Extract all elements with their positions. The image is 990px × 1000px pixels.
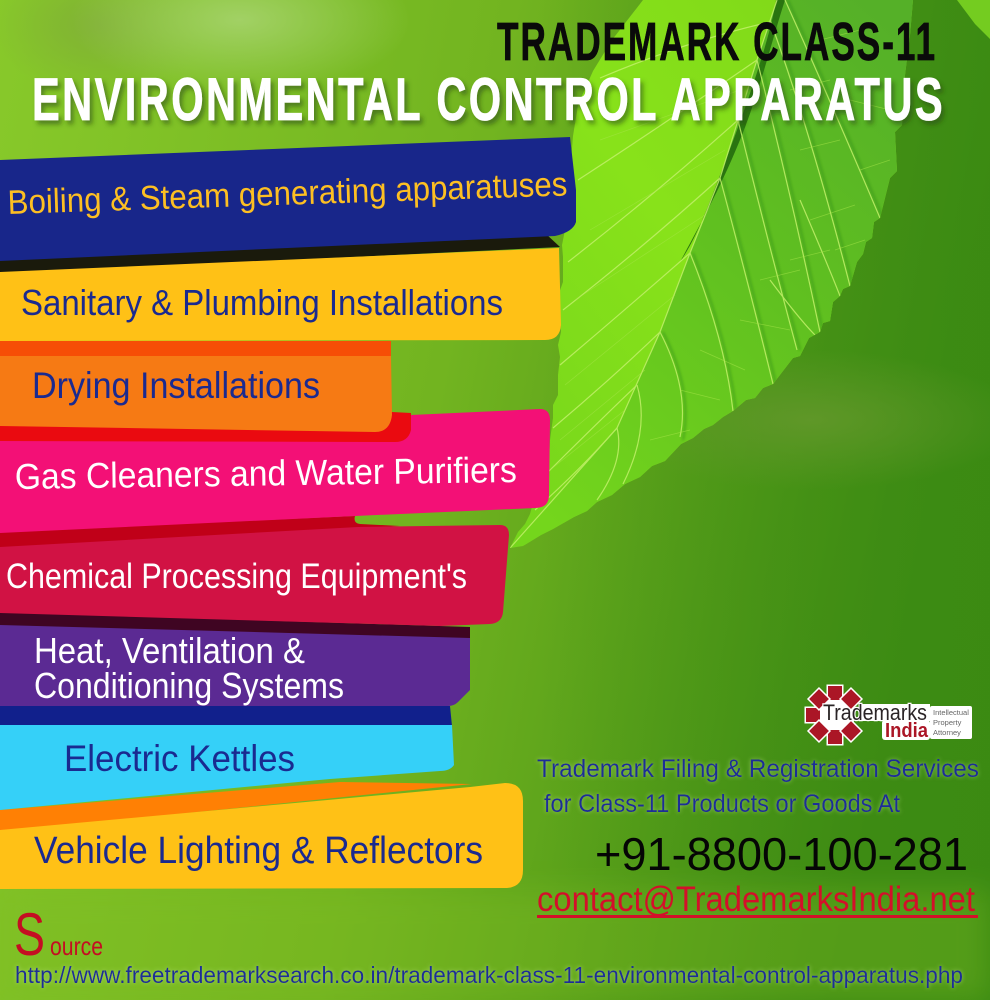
- band: Vehicle Lighting and Reflectors: [0, 782, 523, 889]
- leaf vein shadows: [663, 0, 883, 440]
- logo tagline: Attorney: [933, 728, 961, 737]
- logo white halo: [815, 695, 930, 740]
- band: Chemical Processing Equipment's: Chemical Processing Equipment's: [6, 557, 467, 596]
- band: Gas Cleaners and Water Purifiers: [0, 409, 550, 533]
- band: Sanitary and Plumbing Installations: Sanitary & Plumbing Installations: [21, 282, 503, 323]
- logo tagline: [930, 706, 972, 739]
- band: Boiling and Steam generating apparatuses: Boiling & Steam generating apparatuses: [7, 165, 568, 222]
- leaf right half: [510, 0, 930, 548]
- logo tagline: Intellectual: [933, 708, 969, 717]
- text: phone number: +91-8800-100-281: [595, 828, 968, 880]
- band: Heat, Ventilation and Conditioning Systems: Conditioning Systems: [34, 665, 344, 706]
- band: Sanitary and Plumbing Installations: [0, 233, 561, 341]
- leaf fine veins: [550, 30, 890, 470]
- text: source url: http://www.freetrademarksearch.co.in/trademark-class-11-environmental-control-apparatus.php: [15, 962, 963, 988]
- icon: second leaf corner: [957, 0, 990, 39]
- logo India: India: [885, 720, 929, 742]
- band: Drying Installations: [0, 341, 411, 442]
- band: Heat, Ventilation and Conditioning Systems: Heat, Ventilation &: [34, 630, 305, 671]
- logo gear: [806, 686, 861, 744]
- text: source label: S: [14, 901, 45, 968]
- leaf midrib shadow: [680, 0, 785, 262]
- band: Heat, Ventilation and Conditioning Systems: [0, 612, 470, 706]
- band: Chemical Processing Equipment's: [0, 516, 509, 626]
- logo: Trademarks India: [806, 686, 972, 744]
- band: Electric Kettles: Electric Kettles: [64, 738, 295, 779]
- icon: large green leaf: [500, 0, 930, 560]
- band: Drying Installations: Drying Installations: [32, 365, 320, 406]
- logo wordmark: Trademarks: [823, 700, 927, 725]
- band: Boiling and Steam generating apparatuses: [0, 137, 576, 261]
- text: services line 1: Trademark Filing & Registration Services: [537, 755, 979, 783]
- band: Vehicle Lighting and Reflectors: Vehicle Lighting & Reflectors: [34, 830, 483, 872]
- text: source label: [14, 901, 103, 968]
- text: services line 2: for Class-11 Products or Goods At: [544, 790, 900, 818]
- band: Electric Kettles: [0, 706, 454, 810]
- band: Gas Cleaners and Water Purifiers: Gas Cleaners and Water Purifiers: [15, 449, 517, 497]
- logo tagline: Property: [933, 718, 962, 727]
- text: source label: ource: [50, 931, 103, 961]
- leaf veins: [510, 0, 880, 548]
